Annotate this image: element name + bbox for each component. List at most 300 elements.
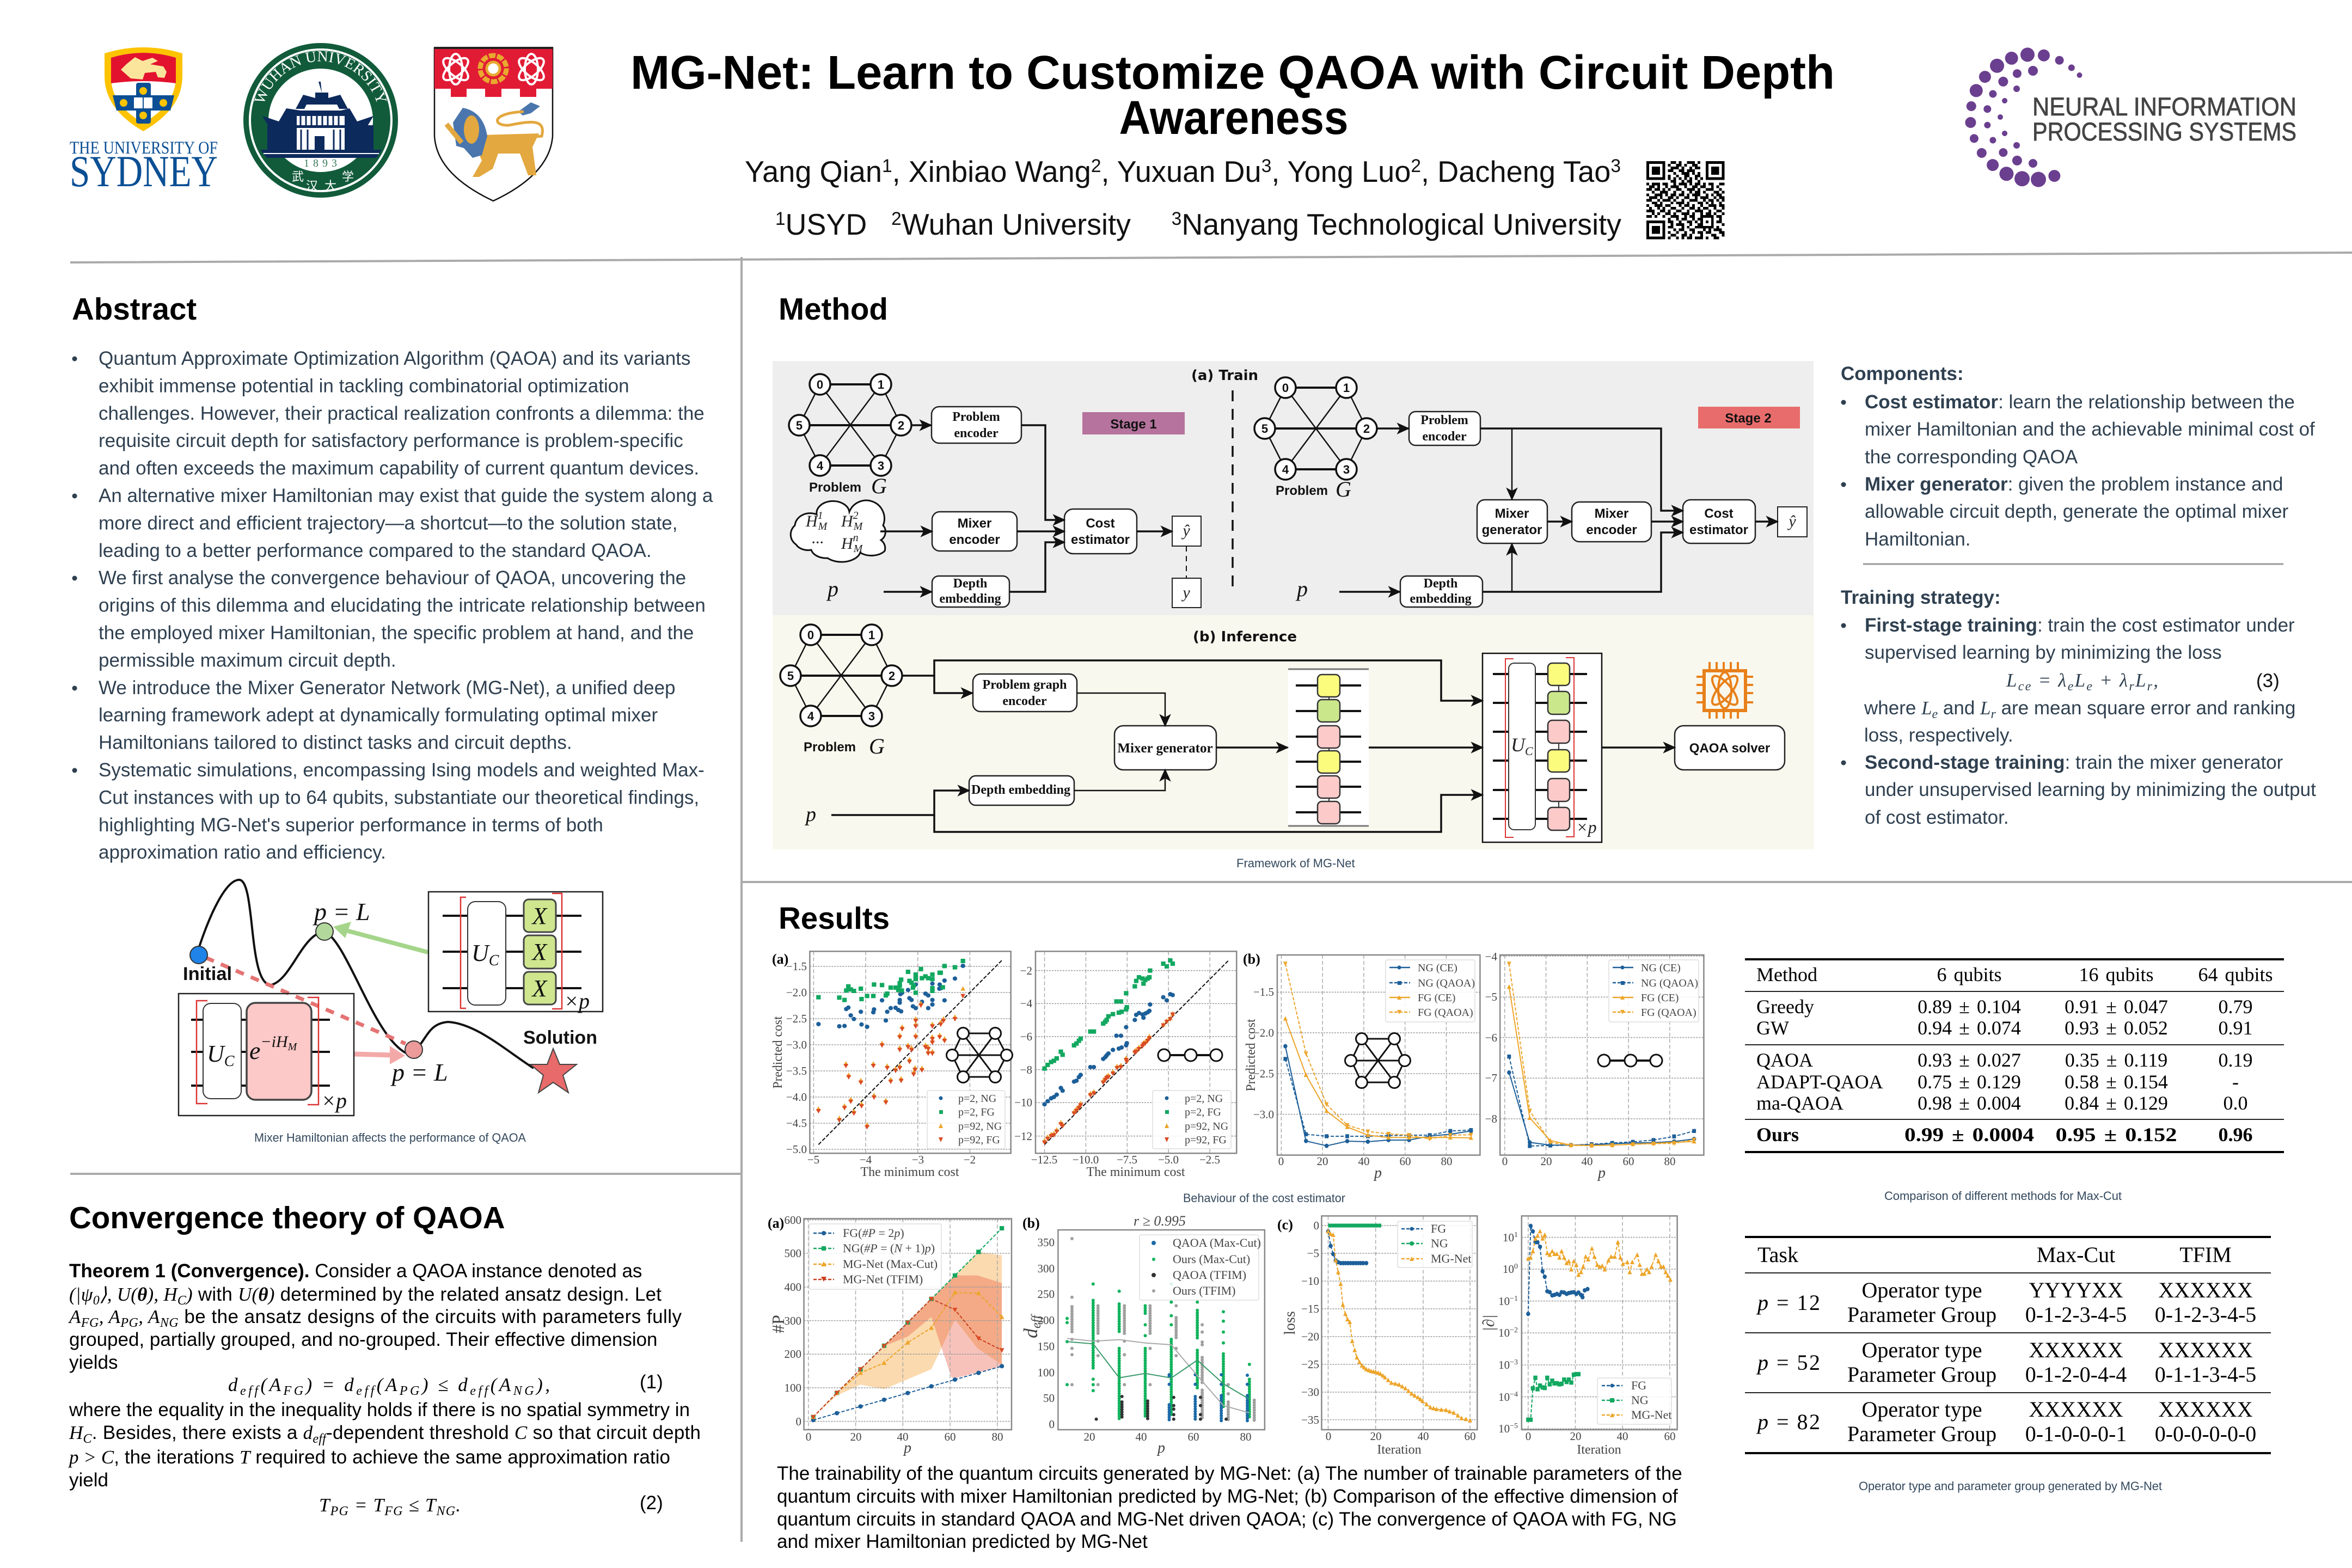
chart: cost vs p, TFIM: 0 xyxy=(1502,1155,1508,1168)
table: operator type and parameter group: Operator type xyxy=(1861,1397,1982,1422)
table: Max-Cut comparison xyxy=(1745,959,2284,1152)
chart: effective dimension: 0 xyxy=(1049,1418,1055,1431)
chart: gradient magnitude: 10 xyxy=(1498,1295,1510,1308)
training bullets: r xyxy=(2147,679,2153,694)
theorem text: where the equality in the inequality holds if there is no spatial symmetry in xyxy=(69,1399,690,1420)
chart: scatter predicted vs minimum cost, Max-Cut: −4.5 xyxy=(786,1117,807,1130)
logo: Neural Information Processing Systems xyxy=(1965,47,2296,188)
components bullets: Mixer generator: given the problem instance and xyxy=(1865,474,2283,495)
chart: number of trainable parameters: 60 xyxy=(944,1430,956,1443)
authors: , Xinbiao Wang xyxy=(892,155,1091,188)
label: p stage 1: p xyxy=(826,577,838,601)
table: operator type and parameter group: Parameter Group xyxy=(1847,1302,1996,1327)
box: cost estimator stage 2: Cost xyxy=(1704,506,1734,521)
chart: convergence loss: −25 xyxy=(1301,1358,1319,1371)
box: cost estimator stage 2: estimator xyxy=(1689,523,1748,537)
cloud: mixer Hamiltonians: ··· xyxy=(811,534,823,552)
chart: scatter predicted vs minimum cost, TFIM: p=2, FG xyxy=(1185,1106,1221,1118)
training bullets: L xyxy=(2006,670,2017,691)
panel: QAOA circuit with generated mixer: ×p xyxy=(1576,817,1597,837)
theorem text: ≤ T xyxy=(403,1494,437,1516)
chart: gradient magnitude: FG xyxy=(1631,1379,1646,1392)
chart: cost vs p, Max-Cut: Predicted cost xyxy=(1244,1019,1258,1091)
chart: scatter predicted vs minimum cost, TFIM: p=92, FG xyxy=(1185,1134,1227,1146)
graph: stage 2 problem: 0 xyxy=(1282,381,1289,395)
panel: X mixer circuit: X xyxy=(531,975,548,1002)
box: problem encoder stage 1: encoder xyxy=(954,426,999,440)
chart: gradient magnitude: −5 xyxy=(1510,1422,1518,1430)
theorem text: H xyxy=(69,1422,84,1443)
chart: cost vs p, TFIM: −4 xyxy=(1485,950,1497,963)
chart: effective dimension: 50 xyxy=(1043,1392,1055,1405)
table: Max-Cut comparison: Method xyxy=(1756,964,1817,985)
chart: gradient magnitude: 0 xyxy=(1514,1263,1518,1271)
theorem text: C xyxy=(83,1432,93,1446)
table: Max-Cut comparison: 0.94 ± 0.074 xyxy=(1918,1017,2021,1039)
chart: effective dimension: QAOA (TFIM) xyxy=(1173,1268,1246,1282)
box: mixer encoder stage 2 xyxy=(1572,502,1651,542)
chart: cost vs p, TFIM: −6 xyxy=(1485,1031,1497,1044)
label: solution: Solution xyxy=(523,1027,597,1048)
theorem text: (2) xyxy=(640,1492,663,1514)
cloud: mixer Hamiltonians: 1 xyxy=(818,510,823,522)
chart: convergence loss: 0 xyxy=(1313,1219,1319,1232)
box: y-hat stage 2 xyxy=(1778,507,1807,537)
caption: behaviour of the cost estimator: Behaviour of the cost estimator xyxy=(1183,1191,1345,1205)
box: QAOA solver: QAOA solver xyxy=(1689,741,1770,756)
chart: gradient magnitude: 10 xyxy=(1503,1231,1514,1244)
chart: gradient magnitude: NG xyxy=(1631,1393,1649,1407)
components bullets xyxy=(1843,391,2315,550)
panel: convergence theory xyxy=(68,1200,701,1518)
table: Max-Cut comparison: QAOA xyxy=(1756,1049,1813,1071)
logo: The University of Sydney xyxy=(70,47,218,196)
chart: effective dimension: Ours (TFIM) xyxy=(1173,1284,1236,1297)
training bullets: , xyxy=(2153,670,2158,691)
graph: stage 2 problem: G xyxy=(1336,477,1351,501)
chart: convergence loss: 20 xyxy=(1370,1430,1382,1443)
chart: gradient magnitude: −3 xyxy=(1510,1358,1518,1367)
components bullets: the corresponding QAOA xyxy=(1865,446,2078,468)
table: Max-Cut comparison: 0.93 ± 0.027 xyxy=(1918,1049,2021,1071)
theorem text: C xyxy=(177,1294,187,1308)
state: pink p=L xyxy=(405,1041,422,1058)
theorem text: PG xyxy=(120,1316,138,1330)
chart: scatter predicted vs minimum cost, Max-Cut: −1.5 xyxy=(786,960,807,973)
caption: trainability: quantum circuits with mixer Hamiltonian predicted by MG-Net; (b) Comparison of the effective dimension of xyxy=(777,1486,1678,1507)
chart: scatter predicted vs minimum cost, TFIM: −12.5 xyxy=(1031,1153,1057,1166)
abstract bullets: Cut instances with up to 64 qubits, substantiate our theoretical findings, xyxy=(99,787,699,808)
authors: 1 xyxy=(882,156,892,176)
abstract bullets: approximation ratio and efficiency. xyxy=(99,842,386,863)
abstract bullets: We introduce the Mixer Generator Network (MG-Net), a unified deep xyxy=(99,677,676,699)
arrows: stage 1 xyxy=(880,425,1186,592)
chart: scatter predicted vs minimum cost, TFIM: p=92, NG xyxy=(1185,1120,1228,1132)
theorem text: A xyxy=(68,1306,81,1327)
chart: cost vs p, TFIM xyxy=(1485,950,1704,1181)
state: initial xyxy=(190,946,207,964)
training bullets: (3) xyxy=(2256,670,2280,691)
table: Max-Cut comparison: 0.91 ± 0.047 xyxy=(2065,996,2168,1018)
chart: gradient magnitude: 10 xyxy=(1498,1326,1510,1339)
authors: 2 xyxy=(1091,156,1101,176)
abstract bullets: Quantum Approximate Optimization Algorithm (QAOA) and its variants xyxy=(99,348,690,369)
label: p inference: p xyxy=(804,803,816,826)
box: cost estimator stage 1 xyxy=(1064,509,1137,554)
cloud: mixer Hamiltonians: M xyxy=(853,543,863,555)
graph: inference problem: 1 xyxy=(868,628,875,642)
panel: mixer Hamiltonian circuit: ×p xyxy=(321,1088,347,1113)
caption: trainability: quantum circuits in standard QAOA and MG-Net driven QAOA; (c) The convergence of QAOA with FG, NG xyxy=(777,1509,1677,1530)
chart: number of trainable parameters: 300 xyxy=(784,1314,801,1327)
panel: X mixer circuit: U xyxy=(471,940,489,966)
table: operator type and parameter group: XXXXXX xyxy=(2158,1397,2253,1422)
abstract bullets: requisite circuit depth for satisfactory performance is problem-specific xyxy=(99,430,683,451)
abstract bullets: challenges. However, their practical realization confronts a dilemma: the xyxy=(99,403,705,424)
chart: convergence loss: −5 xyxy=(1307,1247,1319,1260)
training bullets: ce xyxy=(2018,679,2031,694)
box: QAOA solver xyxy=(1675,726,1785,770)
table: Max-Cut comparison: 0.98 ± 0.004 xyxy=(1918,1092,2021,1114)
caption: trainability: and mixer Hamiltonian predicted by MG-Net xyxy=(777,1531,1148,1552)
training bullets: of cost estimator. xyxy=(1865,807,2009,828)
chart: cost vs p, Max-Cut: −1.5 xyxy=(1253,985,1274,999)
theorem text: ) = d xyxy=(305,1374,354,1395)
chart: convergence loss: Iteration xyxy=(1377,1443,1422,1457)
chart: number of trainable parameters: p xyxy=(903,1440,911,1456)
box: mixer generator inference: Mixer generator xyxy=(1117,741,1213,756)
panel: mixer Hamiltonian circuit: M xyxy=(287,1041,298,1053)
table: operator type and parameter group: Task xyxy=(1757,1242,1798,1267)
chart: cost vs p, Max-Cut: NG (QAOA) xyxy=(1418,977,1475,989)
authors: , Yuxuan Du xyxy=(1101,155,1261,188)
box: depth embedding stage 1: Depth xyxy=(953,577,987,591)
table: operator type and parameter group xyxy=(1745,1237,2271,1453)
chart: scatter predicted vs minimum cost, Max-Cut: p=2, NG xyxy=(958,1093,996,1105)
theorem text: C so that circuit depth xyxy=(514,1422,701,1443)
theorem text: grouped, partially grouped, and no-grouped. Their effective dimension xyxy=(69,1329,658,1350)
heading: abstract: Abstract xyxy=(72,292,197,326)
table: operator type and parameter group: XXXXXX xyxy=(2158,1278,2253,1302)
table: operator type and parameter group: 0-1-2-0-4-4 xyxy=(2025,1362,2127,1387)
graph: inference problem: 4 xyxy=(807,709,814,723)
graph: stage 2 problem: 3 xyxy=(1343,463,1350,476)
box: y-hat stage 1: ŷ xyxy=(1181,522,1190,540)
box: mixer encoder stage 2: encoder xyxy=(1586,523,1637,537)
chart: number of trainable parameters: 100 xyxy=(784,1381,801,1394)
table: operator type and parameter group: Operator type xyxy=(1861,1338,1982,1362)
affiliations: USYD xyxy=(786,207,891,241)
graph: stage 1 problem: G xyxy=(871,474,887,498)
theorem text: d xyxy=(228,1374,238,1395)
logo: Wuhan University: 大 xyxy=(324,179,336,193)
box: y-hat stage 1 xyxy=(1172,516,1201,546)
chart: scatter predicted vs minimum cost, Max-Cut: −4 xyxy=(860,1153,872,1166)
table: operator type and parameter group: Parameter Group xyxy=(1847,1422,1996,1446)
box: mixer encoder stage 1: encoder xyxy=(949,532,1000,547)
box: stage 2 tag: Stage 2 xyxy=(1725,411,1772,426)
training bullets: r xyxy=(1991,707,1996,721)
box: problem encoder stage 1: Problem xyxy=(952,410,1000,424)
abstract bullets: highlighting MG-Net's superior performance in terms of both xyxy=(99,814,603,836)
chart: scatter predicted vs minimum cost, TFIM xyxy=(1014,951,1236,1179)
label: (b) Inference: (b) Inference xyxy=(1193,629,1297,645)
logo: The University of Sydney: SYDNEY xyxy=(70,146,218,196)
authors: 3 xyxy=(1610,156,1621,176)
chart: effective dimension: 150 xyxy=(1038,1340,1055,1353)
panel: QAOA circuit with generated mixer: C xyxy=(1525,744,1533,758)
theorem text: eff xyxy=(470,1384,490,1398)
abstract bullets: leading to a better performance compared to the standard QAOA. xyxy=(99,540,652,561)
abstract bullets: Hamiltonians tailored to distinct tasks and circuit depths. xyxy=(99,732,572,754)
arrow: green xyxy=(333,922,428,952)
authors: 3 xyxy=(1261,156,1271,176)
training bullets: L xyxy=(1980,697,1991,719)
affiliations: 3 xyxy=(1172,209,1181,229)
box: problem encoder stage 1 xyxy=(932,407,1021,443)
theorem text: ), xyxy=(535,1374,550,1395)
theorem text: (|ψ xyxy=(69,1284,94,1305)
chart: cost vs p, TFIM: p xyxy=(1597,1165,1606,1181)
chart: scatter predicted vs minimum cost, TFIM: −10.0 xyxy=(1073,1153,1099,1166)
graph: stage 2 problem: 1 xyxy=(1343,381,1350,395)
authors: Yang Qian xyxy=(745,155,884,188)
graph: stage 2 problem: 2 xyxy=(1363,422,1370,436)
table: Max-Cut comparison: 0.99 ± 0.0004 xyxy=(1904,1124,2034,1146)
theorem text: PG xyxy=(399,1384,419,1398)
chart: convergence loss: (c) xyxy=(1277,1217,1293,1233)
panel: X mixer circuit: ×p xyxy=(564,989,590,1013)
arrows: stage 2 xyxy=(1339,428,1778,592)
panel: X mixer circuit xyxy=(428,892,603,1013)
table: operator type and parameter group: TFIM xyxy=(2179,1242,2232,1267)
training bullets: e xyxy=(1932,707,1938,721)
energy curve xyxy=(198,880,534,1068)
box: stage 1 tag: Stage 1 xyxy=(1110,417,1157,432)
background: train xyxy=(773,361,1814,615)
chart: number of trainable parameters: FG(#P = 2p) xyxy=(843,1226,904,1240)
box: mixer generator stage 2: generator xyxy=(1482,523,1542,537)
abstract bullets: origins of this dilemma and elucidating the intricate relationship between xyxy=(99,595,706,616)
chart: number of trainable parameters: MG-Net (TFIM) xyxy=(843,1272,923,1286)
caption: operator type table: Operator type and parameter group generated by MG-Net xyxy=(1859,1479,2162,1493)
chart: cost vs p, TFIM: −5 xyxy=(1485,990,1497,1003)
panel: mixer Hamiltonian circuit: U xyxy=(207,1040,224,1067)
theorem text: , A xyxy=(138,1306,160,1327)
pink dashed path xyxy=(206,958,406,1044)
cloud: mixer Hamiltonians: M xyxy=(853,520,863,532)
theorem text: θ), H xyxy=(137,1284,177,1305)
chart: effective dimension: (b) xyxy=(1022,1215,1040,1231)
graph: inference problem: Problem xyxy=(804,740,856,755)
chart: effective dimension: 350 xyxy=(1038,1236,1055,1249)
chart: effective dimension: 200 xyxy=(1038,1314,1055,1327)
table: operator type and parameter group: XXXXXX xyxy=(2029,1397,2123,1422)
panel: X mixer circuit: X xyxy=(531,939,548,965)
chart: cost vs p, Max-Cut: p xyxy=(1373,1165,1382,1181)
chart: cost vs p, TFIM: FG (QAOA) xyxy=(1641,1007,1696,1019)
chart: cost vs p, TFIM: NG (CE) xyxy=(1641,962,1681,974)
chart: effective dimension xyxy=(1020,1213,1265,1456)
box: mixer generator stage 2: Mixer xyxy=(1495,506,1529,521)
chart: cost vs p, TFIM: −8 xyxy=(1485,1112,1497,1125)
chart: convergence loss: loss xyxy=(1282,1311,1298,1335)
theorem text xyxy=(68,1260,701,1518)
chart: convergence loss: 60 xyxy=(1465,1430,1475,1443)
theorem text: ⟩, U( xyxy=(100,1284,138,1305)
chart: scatter predicted vs minimum cost, Max-Cut: −2 xyxy=(964,1153,976,1166)
label: p=L top: p = L xyxy=(313,898,370,926)
training bullets: and xyxy=(1938,697,1980,719)
table: Max-Cut comparison: GW xyxy=(1756,1017,1789,1039)
caption: mixer Hamiltonian: Mixer Hamiltonian affects the performance of QAOA xyxy=(254,1131,526,1144)
box: depth embedding stage 1 xyxy=(932,576,1009,607)
theorem text: (A xyxy=(377,1374,397,1395)
box: y stage 1 xyxy=(1172,578,1201,608)
abstract bullets: permissible maximum circuit depth. xyxy=(99,650,396,671)
table: Max-Cut comparison: Greedy xyxy=(1756,996,1814,1018)
theorem text: . Besides, there exists a xyxy=(92,1422,303,1443)
chart: number of trainable parameters: NG(#P = (N + 1)p) xyxy=(843,1241,935,1255)
theorem text: T xyxy=(319,1494,331,1516)
chart: scatter predicted vs minimum cost, TFIM: −5.0 xyxy=(1158,1153,1179,1166)
graph: inference problem: 2 xyxy=(889,669,895,683)
chart: scatter predicted vs minimum cost, TFIM: −12 xyxy=(1014,1130,1032,1143)
chart: cost vs p, Max-Cut: −2.5 xyxy=(1253,1067,1274,1080)
cloud: mixer Hamiltonians xyxy=(791,500,885,562)
components bullets: Cost estimator: learn the relationship between the xyxy=(1865,391,2295,413)
figure: mixer Hamiltonian landscape xyxy=(179,880,603,1116)
label: p stage 2: p xyxy=(1295,577,1308,601)
chart: cost vs p, Max-Cut: −3.0 xyxy=(1253,1108,1274,1121)
chart: gradient magnitude: 10 xyxy=(1498,1391,1510,1404)
theorem text: NG xyxy=(160,1316,179,1330)
chart: scatter predicted vs minimum cost, TFIM: −10 xyxy=(1014,1096,1032,1109)
table: Max-Cut comparison: 0.58 ± 0.154 xyxy=(2065,1071,2168,1093)
graph: inference problem: 0 xyxy=(807,628,814,642)
chart: number of trainable parameters: MG-Net (Max-Cut) xyxy=(843,1257,938,1271)
chart: convergence loss: FG xyxy=(1431,1222,1446,1235)
chart: effective dimension: 20 xyxy=(1083,1430,1095,1443)
logo: Wuhan University: 武 xyxy=(292,170,304,183)
chart: scatter predicted vs minimum cost, TFIM: p=2, NG xyxy=(1185,1093,1223,1105)
table: operator type and parameter group: XXXXXX xyxy=(2158,1338,2253,1362)
theorem text: yields xyxy=(69,1352,118,1373)
affiliations: Wuhan University xyxy=(902,207,1172,241)
title: MG-Net: Learn to Customize QAOA with Circuit Depth xyxy=(630,46,1835,99)
table: Max-Cut comparison: Ours xyxy=(1756,1124,1799,1146)
box: cost estimator stage 1: Cost xyxy=(1086,516,1115,531)
graph: stage 1 problem: 0 xyxy=(817,378,823,391)
training bullets xyxy=(1843,615,2316,828)
box: problem graph encoder: Problem graph xyxy=(983,678,1067,692)
table: operator type and parameter group: Parameter Group xyxy=(1847,1362,1996,1387)
chart: cost vs p, Max-Cut: FG (CE) xyxy=(1418,992,1455,1004)
chart: gradient magnitude: 60 xyxy=(1664,1430,1676,1443)
abstract bullets: Systematic simulations, encompassing Ising models and weighted Max- xyxy=(99,759,705,781)
chart: scatter predicted vs minimum cost, Max-Cut: The minimum cost xyxy=(860,1165,959,1179)
cloud: mixer Hamiltonians: H xyxy=(806,512,818,530)
table: operator type and parameter group: Operator type xyxy=(1861,1278,1982,1302)
box: depth embedding stage 2: embedding xyxy=(1410,592,1472,606)
chart: number of trainable parameters: 80 xyxy=(992,1430,1003,1443)
table: Max-Cut comparison: 64 qubits xyxy=(2198,964,2273,985)
training bullets: e xyxy=(2086,679,2092,694)
chart: convergence loss: −35 xyxy=(1301,1413,1319,1426)
cloud: mixer Hamiltonians: H xyxy=(841,512,853,530)
cloud: mixer Hamiltonians: 2 xyxy=(853,510,859,522)
training bullets: First-stage training: train the cost estimator under xyxy=(1865,615,2295,636)
box: mixer encoder stage 2: Mixer xyxy=(1595,506,1628,521)
box: mixer generator inference xyxy=(1114,726,1216,770)
graph: stage 1 problem: Problem xyxy=(809,480,861,495)
graph: stage 1 problem: 4 xyxy=(817,459,824,473)
table: operator type and parameter group: 0-1-2-3-4-5 xyxy=(2155,1302,2256,1327)
table: Max-Cut comparison: 0.84 ± 0.129 xyxy=(2065,1092,2168,1114)
theorem text: ) xyxy=(185,1284,193,1305)
chart: gradient magnitude: |∂| xyxy=(1480,1314,1498,1332)
theorem text: d xyxy=(303,1422,313,1443)
theorem text: p > C, the iterations T required to achieve the same approximation ratio xyxy=(68,1447,670,1468)
chart: scatter predicted vs minimum cost, Max-Cut: −2.0 xyxy=(786,986,807,999)
chart: effective dimension: Ours (Max-Cut) xyxy=(1173,1252,1250,1266)
chart: cost vs p, Max-Cut xyxy=(1243,951,1480,1181)
table: Max-Cut comparison: 0.93 ± 0.052 xyxy=(2065,1017,2168,1039)
chart: convergence loss: 40 xyxy=(1418,1430,1429,1443)
chart: number of trainable parameters: 500 xyxy=(784,1247,801,1260)
graph: inference problem: G xyxy=(869,734,885,758)
box: depth embedding stage 2: Depth xyxy=(1424,577,1457,591)
box: y stage 1: y xyxy=(1181,584,1190,602)
table: Max-Cut comparison: ma-QAOA xyxy=(1756,1092,1843,1114)
panel: generated mixer gates xyxy=(1288,669,1369,826)
chart: scatter predicted vs minimum cost, Max-Cut: p=2, FG xyxy=(958,1106,995,1118)
theorem text: NG xyxy=(513,1384,534,1398)
title xyxy=(630,46,1835,144)
components bullets: mixer Hamiltonian and the achievable minimal cost of xyxy=(1865,419,2315,440)
chart: scatter predicted vs minimum cost, Max-Cut: −5.0 xyxy=(786,1143,807,1156)
cloud: mixer Hamiltonians: n xyxy=(853,532,859,544)
graph: stage 2 problem: 5 xyxy=(1261,422,1268,436)
components heading: Components: xyxy=(1841,363,1964,384)
chart: cost vs p, Max-Cut: (b) xyxy=(1243,951,1260,967)
logo: Wuhan University: 1893 xyxy=(304,157,341,169)
chart: effective dimension: eff xyxy=(1030,1314,1044,1328)
chart: scatter predicted vs minimum cost, Max-Cut: −3.5 xyxy=(786,1064,807,1077)
chart: gradient magnitude: 10 xyxy=(1498,1358,1510,1371)
box: problem encoder stage 2: Problem xyxy=(1420,413,1468,427)
chart: convergence loss: NG xyxy=(1431,1236,1448,1250)
table: operator type and parameter group: 0-1-1-3-4-5 xyxy=(2155,1362,2256,1387)
chart: gradient magnitude: −1 xyxy=(1510,1295,1518,1303)
chart: scatter predicted vs minimum cost, Max-Cut: p=92, NG xyxy=(958,1120,1002,1132)
box: mixer encoder stage 1: Mixer xyxy=(958,516,991,531)
training bullets: under unsupervised learning by minimizing the output xyxy=(1865,779,2316,800)
graph: stage 1 problem: 3 xyxy=(878,459,884,473)
table: operator type and parameter group: p = 82 xyxy=(1756,1410,1820,1434)
chart: cost vs p, Max-Cut: 60 xyxy=(1399,1155,1411,1168)
theorem text: FG xyxy=(283,1384,303,1398)
components bullets: Hamiltonian. xyxy=(1865,529,1971,550)
theorem text: eff xyxy=(356,1384,376,1398)
chart: effective dimension: 100 xyxy=(1038,1366,1055,1379)
chart: gradient magnitude: −4 xyxy=(1510,1391,1518,1399)
theorem text: Theorem 1 (Convergence). Consider a QAOA instance denoted as xyxy=(69,1260,642,1282)
chart: scatter predicted vs minimum cost, Max-Cut: −3 xyxy=(912,1153,924,1166)
abstract bullets xyxy=(75,348,713,863)
training heading: Training strategy: xyxy=(1841,587,2001,608)
chart: effective dimension: r ≥ 0.995 xyxy=(1134,1213,1186,1229)
